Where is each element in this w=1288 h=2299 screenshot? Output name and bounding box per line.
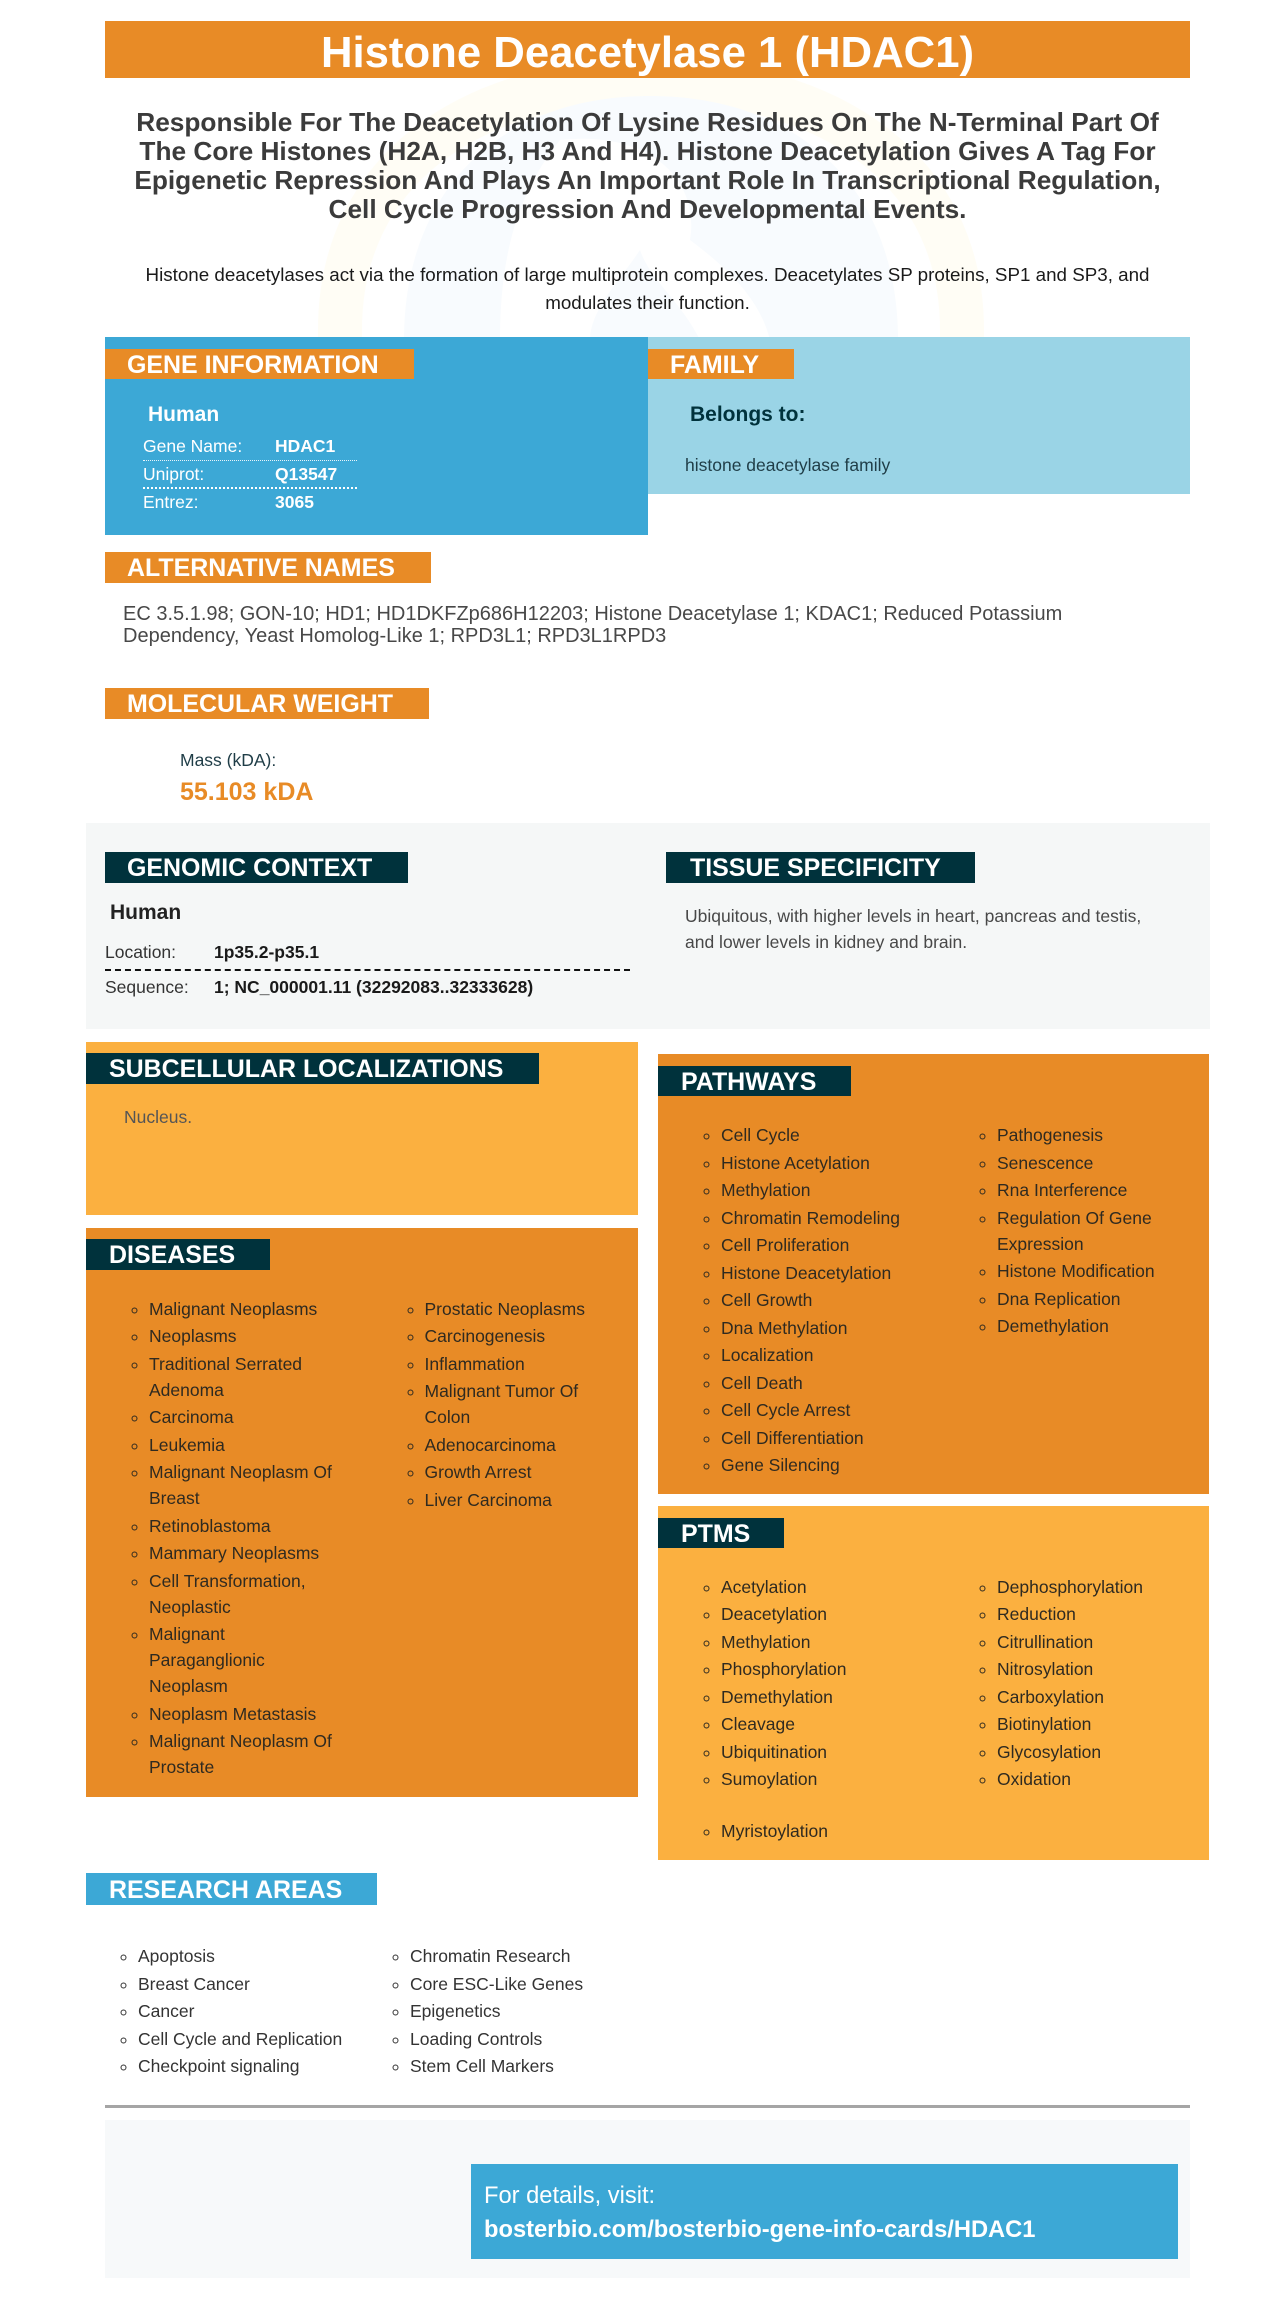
- heading: family: [648, 349, 794, 379]
- list: diseases column 1: Traditional Serrated: [149, 1354, 302, 1374]
- list: diseases column 2: [408, 1298, 585, 1510]
- list: ptms column 1: Myristoylation: [721, 1821, 828, 1841]
- heading: diseases: [86, 1239, 270, 1270]
- list: ptms column 1: Methylation: [721, 1632, 810, 1652]
- list: diseases column 2: Malignant Tumor Of: [424, 1381, 578, 1401]
- tissue specificity text: [685, 906, 1141, 952]
- heading: tissue specificity: TISSUE SPECIFICITY: [690, 854, 941, 882]
- panel: gene information: [105, 337, 648, 535]
- list: diseases column 1: Leukemia: [149, 1434, 225, 1454]
- list: pathways column 1: Cell Cycle: [721, 1125, 800, 1145]
- list: pathways column 1: Methylation: [721, 1180, 810, 1200]
- panel: pathways: [658, 1054, 1209, 1494]
- gene identifiers table: Entrez:: [143, 492, 198, 512]
- gene identifiers table: 3065: [275, 492, 314, 512]
- belongs to label: Belongs to:: [690, 403, 806, 426]
- gene identifiers table: Uniprot:: [143, 464, 204, 484]
- list: pathways column 2: Senescence: [997, 1152, 1093, 1172]
- sequence row: 1; NC_000001.11 (32292083..32333628): [214, 977, 533, 997]
- heading: molecular weight: MOLECULAR WEIGHT: [127, 690, 393, 718]
- list: diseases column 1: Malignant: [149, 1624, 225, 1644]
- panel: genomic context and tissue specificity: [86, 823, 1210, 1029]
- list: diseases column 2: Growth Arrest: [424, 1462, 531, 1482]
- list: pathways column 2: Histone Modification: [997, 1261, 1155, 1281]
- list: pathways column 1: Cell Differentiation: [721, 1428, 864, 1448]
- heading: ptms: PTMS: [681, 1520, 750, 1548]
- list: diseases column 1: Retinoblastoma: [149, 1516, 271, 1536]
- list: research areas column 2: [392, 1946, 583, 2076]
- list: ptms column 2: Oxidation: [997, 1769, 1071, 1789]
- list: diseases column 1: Cell Transformation,: [149, 1570, 306, 1590]
- list: diseases column 1: Adenoma: [149, 1380, 224, 1400]
- background watermark: [318, 78, 984, 337]
- list: pathways column 2: Regulation Of Gene: [997, 1208, 1152, 1228]
- list: diseases column 1: Neoplasm Metastasis: [149, 1704, 316, 1724]
- localization text: Nucleus.: [124, 1107, 192, 1127]
- panel: ptms: [658, 1506, 1209, 1860]
- heading: research areas: RESEARCH AREAS: [109, 1876, 342, 1904]
- subtitle: Epigenetic Repression And Plays An Important Role In Transcriptional Regulation,: [134, 165, 1161, 195]
- list: ptms column 2: Carboxylation: [997, 1686, 1104, 1706]
- gene identifiers table: HDAC1: [275, 436, 335, 456]
- list: pathways column 2: Pathogenesis: [997, 1125, 1103, 1145]
- list: pathways column 2: Rna Interference: [997, 1180, 1127, 1200]
- location row: [105, 942, 319, 962]
- list: research areas column 1: Cell Cycle and Replication: [138, 2028, 342, 2048]
- list: diseases column 2: Liver Carcinoma: [424, 1490, 552, 1510]
- list: diseases column 2: Carcinogenesis: [424, 1326, 545, 1346]
- sequence row: Sequence:: [105, 977, 189, 997]
- panel: molecular weight: [105, 688, 429, 806]
- list: diseases column 1: Mammary Neoplasms: [149, 1543, 319, 1563]
- list: research areas column 1: [120, 1946, 342, 2076]
- list: diseases column 1: Carcinoma: [149, 1407, 234, 1427]
- list: research areas column 1: Cancer: [138, 2001, 194, 2021]
- list: diseases column 1: Prostate: [149, 1757, 214, 1777]
- list: diseases column 1: Neoplasm: [149, 1676, 228, 1696]
- heading: pathways: PATHWAYS: [681, 1068, 816, 1096]
- list: diseases column 2: Inflammation: [424, 1354, 525, 1374]
- heading: diseases: DISEASES: [109, 1241, 235, 1269]
- mass label: Mass (kDA):: [180, 750, 276, 770]
- mass value: 55.103 kDA: [180, 778, 313, 806]
- panel: footer: [105, 2120, 1190, 2278]
- list: research areas column 1: Checkpoint signaling: [138, 2056, 300, 2076]
- list: pathways column 2: Demethylation: [997, 1316, 1109, 1336]
- list: pathways column 1: [704, 1125, 900, 1475]
- species label: Human: [148, 403, 219, 426]
- list: ptms column 1: Demethylation: [721, 1686, 833, 1706]
- list: pathways column 2: [980, 1125, 1155, 1336]
- gene identifiers table: [143, 436, 357, 512]
- list: research areas column 2: Loading Controls: [410, 2028, 542, 2048]
- list: pathways column 2: Dna Replication: [997, 1288, 1121, 1308]
- summary paragraph: Histone deacetylases act via the formation of large multiprotein complexes. Deacetylates SP proteins, SP1 and SP3, and: [146, 264, 1149, 285]
- gene identifiers table: Gene Name:: [143, 436, 242, 456]
- list: research areas column 1: Apoptosis: [138, 1946, 215, 1966]
- list: research areas column 2: Chromatin Research: [410, 1946, 570, 1966]
- list: research areas column 1: Breast Cancer: [138, 1974, 250, 1994]
- list: research areas column 2: Core ESC-Like Genes: [410, 1974, 583, 1994]
- list: diseases column 1: Malignant Neoplasm Of: [149, 1731, 332, 1751]
- subtitle: The Core Histones (H2A, H2B, H3 And H4). Histone Deacetylation Gives A Tag For: [139, 136, 1156, 166]
- panel: research areas: [86, 1873, 583, 2076]
- list: pathways column 1: Dna Methylation: [721, 1318, 847, 1338]
- heading: pathways: [658, 1066, 851, 1096]
- subtitle: Responsible For The Deacetylation Of Lysine Residues On The N-Terminal Part Of: [136, 107, 1159, 137]
- heading: family: FAMILY: [670, 351, 759, 379]
- list: pathways column 1: Localization: [721, 1345, 813, 1365]
- heading: genomic context: GENOMIC CONTEXT: [127, 854, 372, 882]
- panel: subcellular localizations: [86, 1042, 638, 1215]
- tissue specificity text: Ubiquitous, with higher levels in heart, pancreas and testis,: [685, 906, 1141, 926]
- title banner: Histone Deacetylase 1 (HDAC1): [321, 28, 974, 77]
- list: diseases column 1: Neoplasms: [149, 1326, 237, 1346]
- location row: 1p35.2-p35.1: [214, 942, 319, 962]
- tissue specificity text: and lower levels in kidney and brain.: [685, 932, 967, 952]
- list: ptms column 1: Cleavage: [721, 1714, 795, 1734]
- list: ptms column 2: Biotinylation: [997, 1714, 1091, 1734]
- list: pathways column 1: Histone Acetylation: [721, 1152, 870, 1172]
- heading: alternative names: ALTERNATIVE NAMES: [127, 554, 395, 582]
- heading: subcellular localizations: SUBCELLULAR LOCALIZATIONS: [109, 1055, 503, 1083]
- list: ptms column 2: Citrullination: [997, 1632, 1093, 1652]
- list: pathways column 1: Cell Growth: [721, 1290, 812, 1310]
- heading: gene information: GENE INFORMATION: [127, 351, 379, 379]
- list: ptms column 1: Deacetylation: [721, 1604, 827, 1624]
- panel: family: [648, 337, 1190, 494]
- alternative names text: Dependency, Yeast Homolog-Like 1; RPD3L1; RPD3L1RPD3: [123, 625, 666, 647]
- list: ptms column 1: Ubiquitination: [721, 1742, 827, 1762]
- panel: alternative names: [105, 552, 1062, 647]
- location row: Location:: [105, 942, 176, 962]
- list: pathways column 1: Cell Death: [721, 1372, 803, 1392]
- list: research areas column 2: Stem Cell Markers: [410, 2056, 554, 2076]
- family value: histone deacetylase family: [685, 455, 890, 475]
- list: diseases column 1: Neoplastic: [149, 1596, 231, 1616]
- subtitle: Cell Cycle Progression And Developmental Events.: [328, 194, 966, 224]
- list: ptms column 2: Dephosphorylation: [997, 1576, 1143, 1596]
- callout: details link: For details, visit:: [484, 2183, 655, 2209]
- summary paragraph: modulates their function.: [545, 292, 750, 313]
- list: diseases column 1: [132, 1298, 332, 1777]
- list: ptms column 1: [704, 1576, 846, 1841]
- list: diseases column 1: Paraganglionic: [149, 1650, 265, 1670]
- list: diseases column 2: Adenocarcinoma: [424, 1434, 556, 1454]
- list: ptms column 1: Phosphorylation: [721, 1659, 846, 1679]
- list: diseases column 2: Colon: [424, 1407, 470, 1427]
- summary paragraph: [146, 264, 1149, 313]
- callout: details link: bosterbio.com/bosterbio-gene-info-cards/HDAC1: [484, 2217, 1035, 2243]
- list: pathways column 2: Expression: [997, 1234, 1084, 1254]
- list: ptms column 1: Acetylation: [721, 1576, 807, 1596]
- list: pathways column 1: Cell Proliferation: [721, 1235, 849, 1255]
- list: research areas column 2: Epigenetics: [410, 2001, 500, 2021]
- list: ptms column 2: Glycosylation: [997, 1742, 1101, 1762]
- subtitle: [134, 107, 1161, 224]
- list: pathways column 1: Chromatin Remodeling: [721, 1208, 900, 1228]
- list: ptms column 2: Nitrosylation: [997, 1659, 1093, 1679]
- title banner: [105, 21, 1190, 78]
- alternative names text: EC 3.5.1.98; GON-10; HD1; HD1DKFZp686H12203; Histone Deacetylase 1; KDAC1; Reduced Potassium: [123, 603, 1062, 625]
- list: diseases column 2: Prostatic Neoplasms: [424, 1298, 585, 1318]
- list: ptms column 2: [980, 1576, 1143, 1789]
- alternative names text: [123, 603, 1062, 647]
- panel: diseases: [86, 1228, 638, 1797]
- species label: Human: [110, 901, 181, 924]
- list: pathways column 1: Histone Deacetylation: [721, 1262, 891, 1282]
- gene identifiers table: Q13547: [275, 464, 337, 484]
- callout: details link: [471, 2164, 1178, 2259]
- list: diseases column 1: Malignant Neoplasm Of: [149, 1462, 332, 1482]
- list: pathways column 1: Gene Silencing: [721, 1455, 840, 1475]
- heading: ptms: [658, 1518, 784, 1548]
- list: ptms column 1: Sumoylation: [721, 1769, 817, 1789]
- list: diseases column 1: Malignant Neoplasms: [149, 1298, 317, 1318]
- list: diseases column 1: Breast: [149, 1488, 200, 1508]
- list: pathways column 1: Cell Cycle Arrest: [721, 1400, 850, 1420]
- list: ptms column 2: Reduction: [997, 1604, 1076, 1624]
